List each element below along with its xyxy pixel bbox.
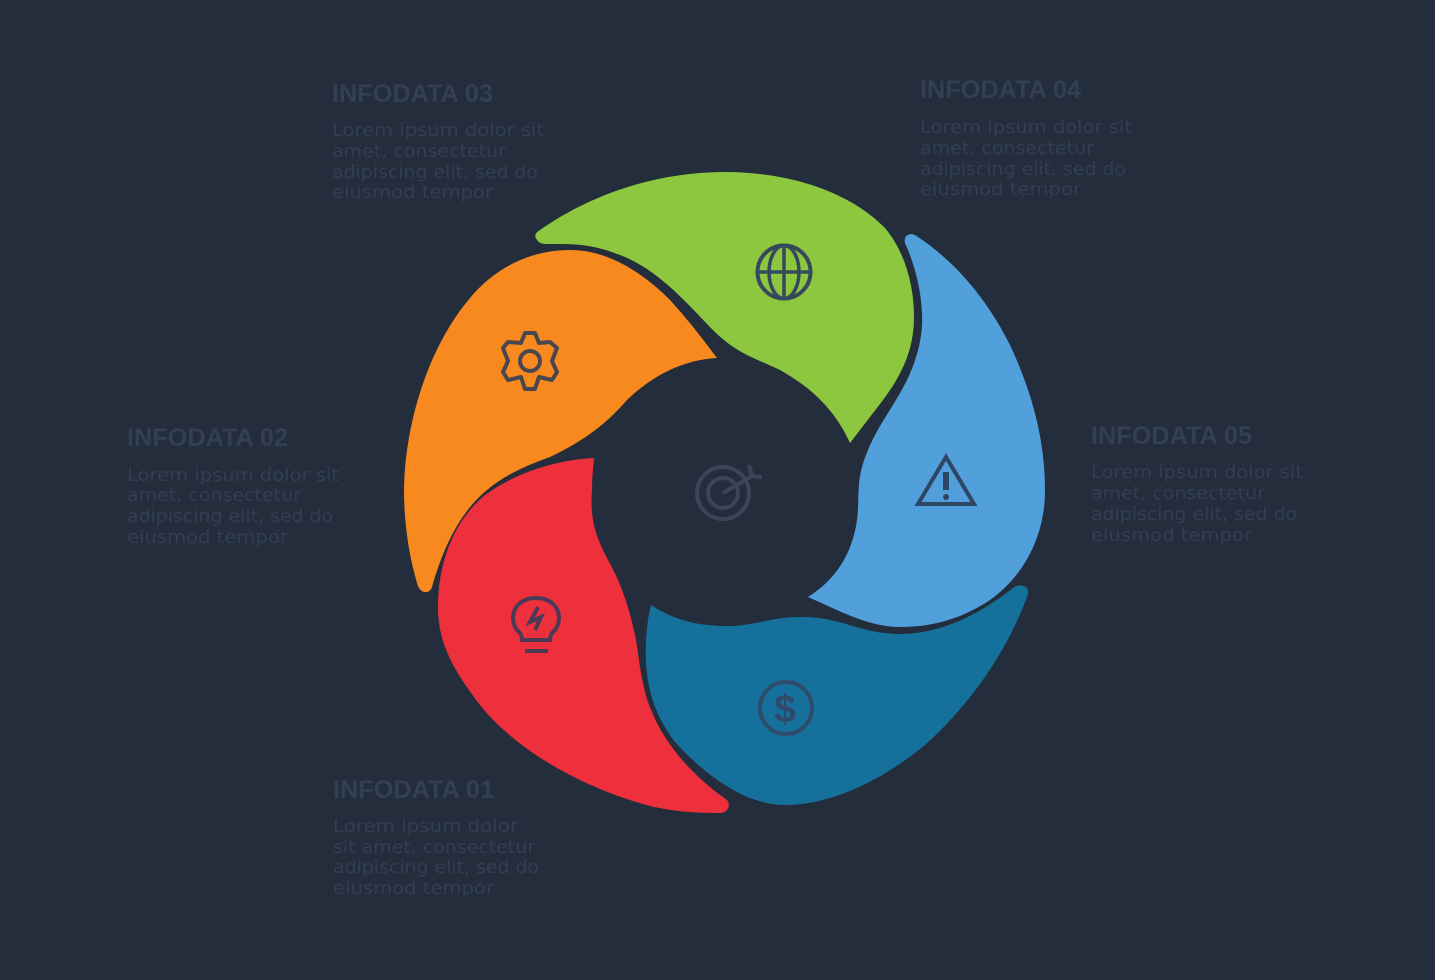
label: infodata 02 — [127, 424, 339, 548]
segment: light blue — [808, 234, 1045, 627]
icon: dollar: $ — [774, 688, 796, 731]
label: infodata 05 — [1091, 422, 1303, 546]
label: infodata 01: adipiscing elit, sed do — [333, 857, 539, 878]
label: infodata 01 — [333, 776, 539, 899]
segment: orange — [404, 250, 717, 592]
icon: dollar — [760, 682, 812, 734]
label: infodata 01: Lorem ipsum dolor — [333, 816, 519, 837]
label: infodata 04: adipiscing elit, sed do — [920, 159, 1126, 180]
label: infodata 03: INFODATA 03 — [332, 80, 493, 108]
segment: red — [438, 458, 729, 813]
label: infodata 04: INFODATA 04 — [920, 76, 1081, 104]
label: infodata 01: sit amet, consectetur — [333, 837, 536, 858]
label: infodata 03: Lorem ipsum dolor sit — [332, 120, 544, 141]
icon: globe — [758, 245, 810, 299]
segment: dark blue — [646, 586, 1028, 805]
label: infodata 02: adipiscing elit, sed do — [127, 506, 333, 527]
label: infodata 03: amet, consectetur — [332, 141, 507, 162]
segment: green — [535, 172, 914, 443]
label: infodata 05: Lorem ipsum dolor sit — [1091, 462, 1303, 483]
label: infodata 04: eiusmod tempor — [920, 179, 1082, 200]
label: infodata 01: eiusmod tempor — [333, 878, 495, 899]
label: infodata 02: Lorem ipsum dolor sit — [127, 465, 339, 486]
label: infodata 02: eiusmod tempor — [127, 527, 289, 548]
label: infodata 05: adipiscing elit, sed do — [1091, 504, 1297, 525]
icon: target — [697, 465, 762, 519]
label: infodata 04: Lorem ipsum dolor sit — [920, 117, 1132, 138]
icon: light bulb — [513, 598, 559, 651]
label: infodata 04 — [920, 76, 1132, 200]
label: infodata 04: amet, consectetur — [920, 138, 1095, 159]
icon: warning triangle — [918, 457, 974, 504]
label: infodata 02: INFODATA 02 — [127, 424, 288, 452]
label: infodata 03: adipiscing elit, sed do — [332, 162, 538, 183]
label: infodata 03: eiusmod tempor — [332, 182, 494, 203]
icon: gear — [503, 333, 557, 389]
label: infodata 05: eiusmod tempor — [1091, 525, 1253, 546]
label: infodata 01: INFODATA 01 — [333, 776, 494, 804]
label: infodata 05: amet, consectetur — [1091, 483, 1266, 504]
label: infodata 05: INFODATA 05 — [1091, 422, 1252, 450]
label: infodata 03 — [332, 80, 544, 203]
label: infodata 02: amet, consectetur — [127, 485, 302, 506]
